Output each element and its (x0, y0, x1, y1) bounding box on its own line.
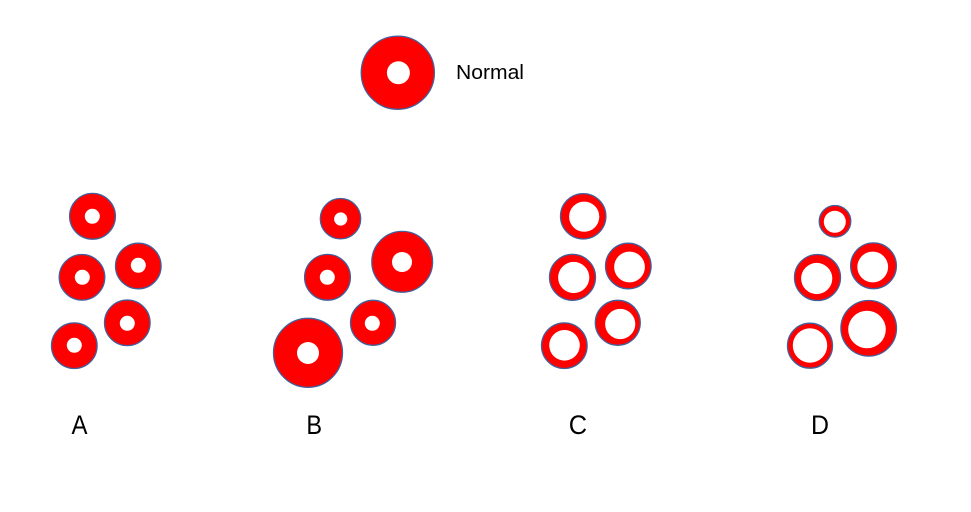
label: A: A (72, 410, 88, 440)
group A: normal-sized cells with small pallor (52, 193, 161, 369)
group B: varied-size cells with small pallor (274, 198, 433, 387)
normal cell icon (361, 36, 434, 109)
label: B: B (306, 410, 322, 440)
label: C: C (569, 410, 587, 440)
group D: varied-size cells with large pallor (788, 206, 896, 368)
label: D: D (811, 410, 829, 440)
label: Normal: Normal (456, 62, 524, 84)
group C: normal-sized cells with large pallor (542, 194, 651, 369)
